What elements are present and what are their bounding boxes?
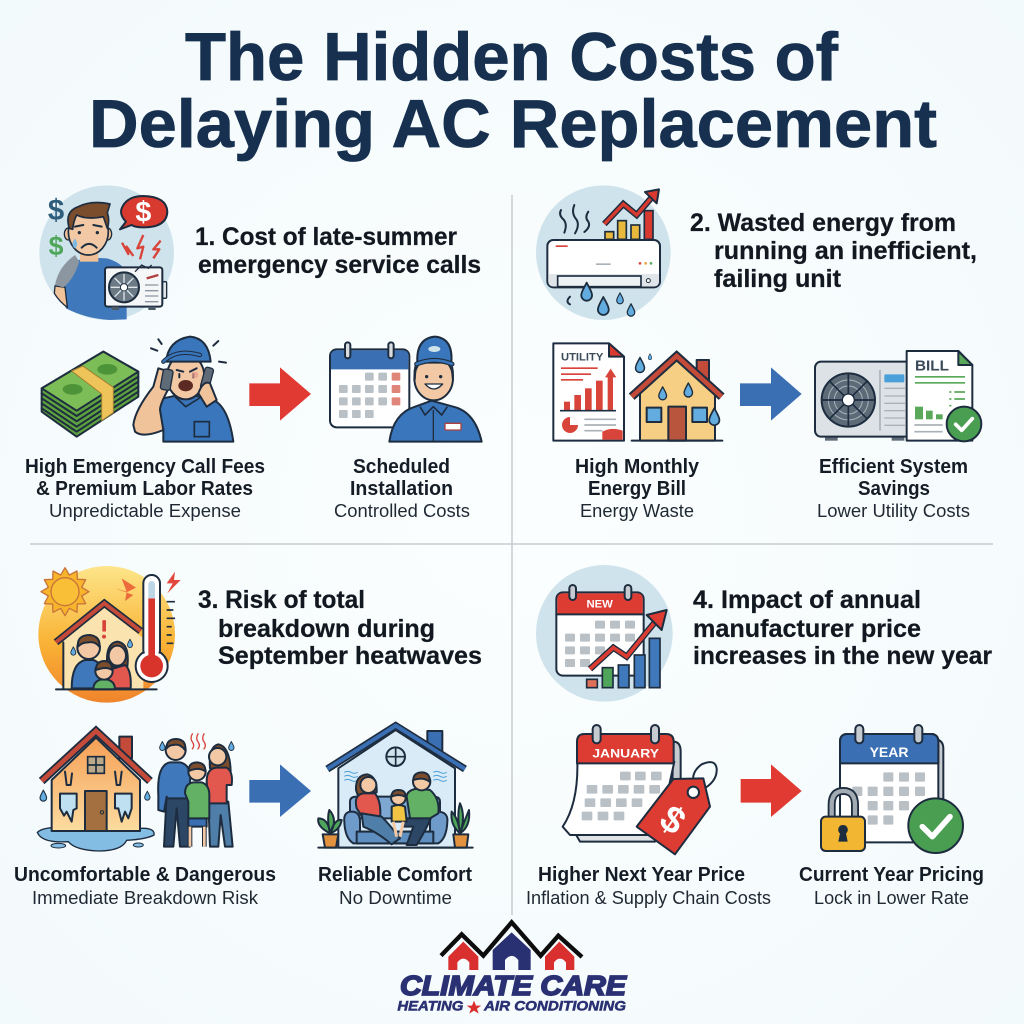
title: Delaying AC Replacement [89,86,937,162]
tagline [397,998,626,1014]
label: scheduled installation: Controlled Costs [334,501,470,521]
icon: reduced bill with check: BILL [915,358,949,374]
icon: January calendar with price tag [563,725,717,854]
heading: section 4: manufacturer price [693,615,921,643]
label: high monthly bill: Energy Bill [588,478,686,500]
label: high emergency fees: & Premium Labor Rates [36,478,253,500]
label: high monthly bill: High Monthly [575,456,700,478]
icon: stressed homeowner with broken AC [39,185,174,320]
heading: section 3: September heatwaves [218,642,482,670]
heading: section 2 [690,209,977,293]
logo: Climate Care [397,922,627,1014]
icon: January calendar with price tag: $ [652,796,694,843]
arrow: waste to savings [740,367,802,421]
label: efficient savings: Lower Utility Costs [817,501,970,521]
label: reliable comfort [318,864,472,908]
icon: family in hot house with thermometer [38,566,181,703]
icon: new year calendar with rising chart: NEW [586,599,613,611]
heading: section 2: failing unit [714,265,842,293]
icon: utility bill [553,343,624,441]
title [89,19,937,162]
icon: stressed homeowner with broken AC: $ [49,231,64,261]
heading: section 4: 4. Impact of annual [693,586,921,614]
tagline: HEATING [397,998,463,1014]
icon: damaged leaking house [37,731,154,851]
label: uncomfortable and dangerous: Immediate Breakdown Risk [32,888,259,908]
icon: calendar with technician [330,337,482,442]
panel: wasted energy [536,185,981,521]
label: high monthly bill: Energy Waste [580,501,694,521]
icon: stressed homeowner with broken AC: $ [48,194,64,227]
label: scheduled installation: Installation [350,478,453,500]
label: high emergency fees: High Emergency Call Fees [25,456,265,478]
title: The Hidden Costs of [185,19,838,95]
label: efficient savings: Efficient System [819,456,968,478]
heading: section 3: breakdown during [218,615,435,643]
icon: leaky house [632,354,722,441]
label: higher next year price [526,864,771,908]
heading: section 2: running an inefficient, [714,237,977,265]
icon: new year calendar with rising chart [536,565,673,702]
icon: locked in calendar with check [821,725,963,853]
arrow: cost to controlled [249,367,311,421]
icon: comfortable family in cool house [318,726,473,848]
label: higher next year price: Inflation & Supply Chain Costs [526,888,771,908]
label: reliable comfort: Reliable Comfort [318,864,472,886]
heading: section 1: emergency service calls [198,251,481,279]
label: current year pricing: Current Year Pricing [799,864,984,886]
label: high monthly bill [575,456,700,521]
icon: stressed homeowner with broken AC: $ [135,197,151,229]
label: scheduled installation [334,456,470,521]
label: reliable comfort: No Downtime [339,888,452,908]
icon: efficient outdoor unit [815,362,915,441]
icon: overheated family [158,733,234,847]
heading: section 4 [693,586,992,670]
icon: leaking AC with rising costs [536,185,671,320]
label: efficient savings [817,456,970,521]
heading: section 2: 2. Wasted energy from [690,209,956,237]
icon: stressed technician on phones [133,337,233,442]
wordmark: CLIMATE CARE [400,970,627,1001]
arrow: danger to comfort [249,764,311,817]
label: higher next year price: Higher Next Year Price [538,864,745,886]
label: uncomfortable and dangerous: Uncomfortable & Dangerous [14,864,276,886]
heading: section 3: 3. Risk of total [198,586,365,614]
panel: emergency service calls [25,185,482,521]
heading: section 1 [195,223,481,279]
heading: section 1: 1. Cost of late-summer [195,223,457,251]
arrow: higher to current price [741,764,802,817]
heading: section 4: increases in the new year [693,642,992,670]
label: current year pricing [799,864,984,908]
label: current year pricing: Lock in Lower Rate [814,888,969,908]
tagline: AIR CONDITIONING [483,998,626,1014]
panel: heatwave breakdown [14,566,482,908]
icon: January calendar with price tag: JANUARY [592,747,659,761]
icon: utility bill: UTILITY [561,351,604,363]
panel: manufacturer price increases [526,565,992,908]
heading: section 3 [198,586,482,670]
label: scheduled installation: Scheduled [353,456,450,478]
label: high emergency fees: Unpredictable Expense [49,501,241,521]
icon: three house roofline [441,922,582,970]
icon: locked in calendar with check: YEAR [870,744,908,760]
icon: reduced bill with check [907,351,981,441]
icon: stack of cash [42,352,138,437]
label: uncomfortable and dangerous [14,864,276,908]
label: efficient savings: Savings [858,478,930,500]
label: high emergency fees [25,456,265,521]
